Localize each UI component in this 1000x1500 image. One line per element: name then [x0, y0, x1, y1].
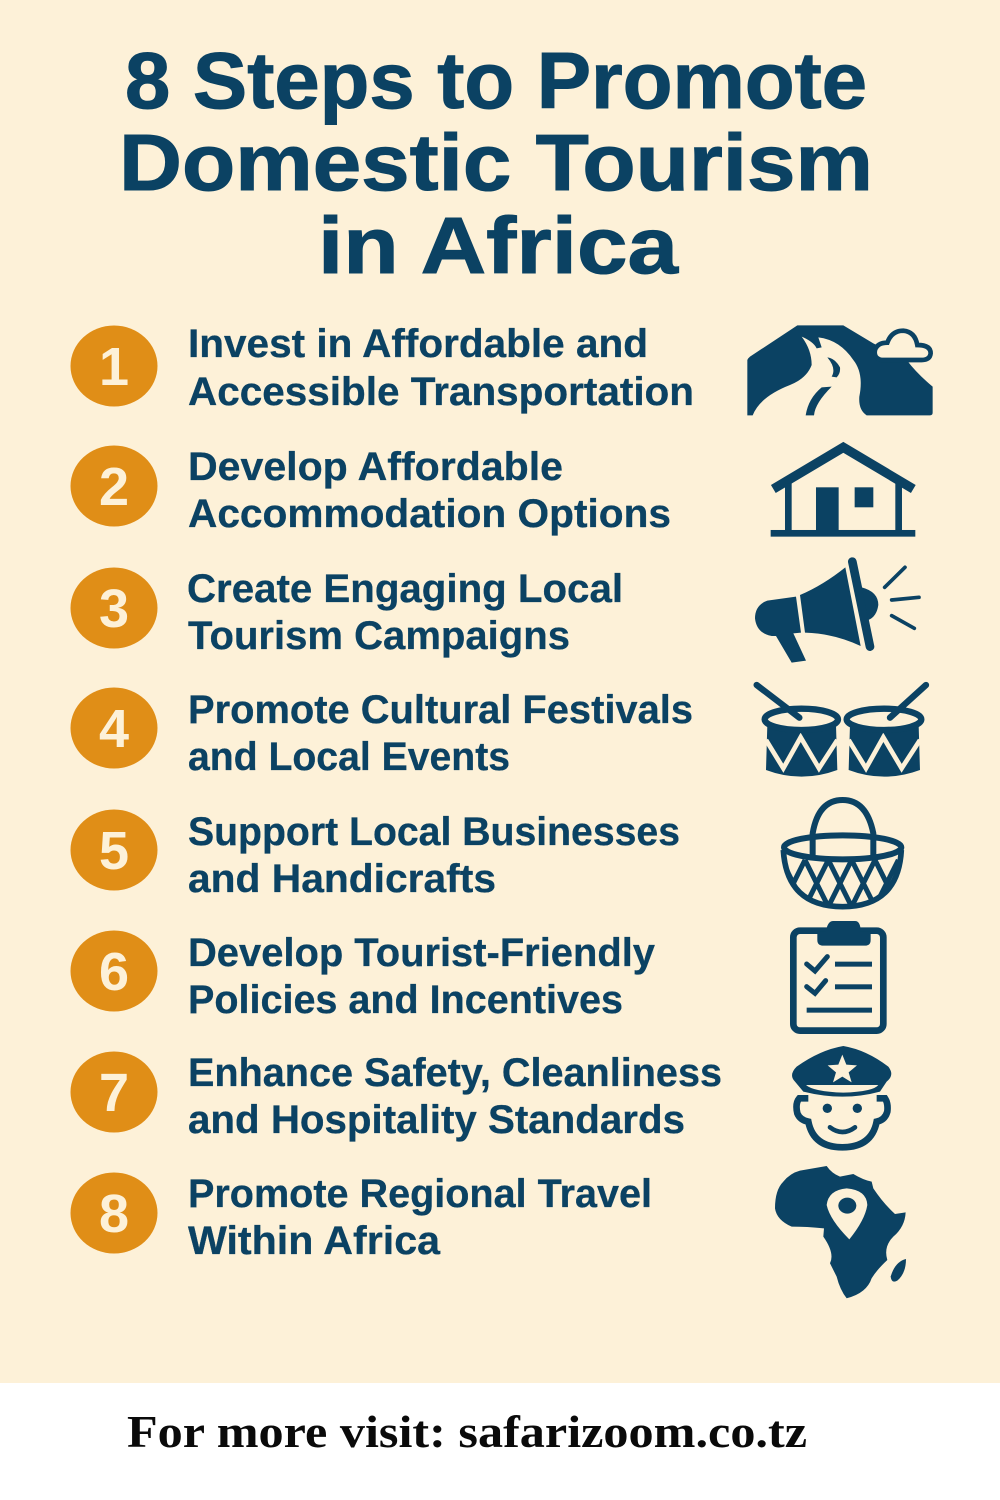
step 2 text: Accommodation Options — [188, 492, 671, 536]
step 3 text: Create Engaging Local — [187, 567, 623, 611]
step 6 text — [188, 931, 656, 1022]
title: Domestic Tourism — [119, 118, 873, 207]
step 4 text — [188, 688, 693, 779]
number badge 7 — [70, 1052, 158, 1132]
step 6 text: Develop Tourist-Friendly — [188, 931, 656, 975]
step 2 text — [188, 445, 671, 536]
icon: police officer face — [792, 1046, 891, 1147]
step 2 text: Develop Affordable — [188, 445, 563, 489]
step 1 — [70, 322, 933, 415]
step 4 — [70, 685, 926, 779]
step 7 text: and Hospitality Standards — [188, 1098, 685, 1142]
icon: woven basket — [778, 800, 902, 913]
step 1 text: Invest in Affordable and — [188, 322, 648, 366]
step 5 text: Support Local Businesses — [188, 810, 680, 854]
number badge 4 — [70, 688, 158, 768]
step 8 text: Within Africa — [188, 1219, 441, 1263]
title — [119, 36, 873, 290]
title: in Africa — [318, 201, 679, 290]
number badge 5 — [70, 810, 158, 890]
number badge 2: 2 — [99, 457, 129, 517]
number badge 3 — [70, 568, 158, 648]
number badge 7: 7 — [99, 1063, 129, 1123]
number badge 1 — [70, 326, 158, 406]
number badge 5: 5 — [99, 821, 129, 881]
step 4 text: Promote Cultural Festivals — [188, 688, 693, 732]
footer website link: For more visit: safarizoom.co.tz — [127, 1407, 807, 1457]
step 5 text: and Handicrafts — [188, 857, 496, 901]
step 4 text: and Local Events — [188, 735, 510, 779]
icon: house — [771, 447, 915, 537]
step 8 text: Promote Regional Travel — [188, 1172, 652, 1216]
step 2 — [70, 445, 915, 537]
number badge 3: 3 — [99, 579, 129, 639]
step 6 text: Policies and Incentives — [188, 978, 623, 1022]
icon: mountain road with cloud — [747, 325, 933, 415]
step 5 — [70, 800, 902, 913]
title: 8 Steps to Promote — [125, 36, 867, 125]
step 7 text — [188, 1051, 722, 1142]
step 1 text — [188, 322, 694, 414]
number badge 6: 6 — [99, 942, 129, 1002]
number badge 8 — [70, 1172, 158, 1254]
step 8 — [70, 1166, 906, 1298]
step 7 — [70, 1046, 891, 1147]
number badge 4: 4 — [99, 699, 129, 759]
step 6 — [70, 921, 883, 1031]
icon: megaphone — [755, 562, 919, 663]
number badge 1: 1 — [99, 337, 129, 397]
number badge 8: 8 — [99, 1184, 129, 1244]
number badge 6 — [70, 930, 158, 1012]
step 1 text: Accessible Transportation — [188, 370, 694, 414]
number badge 2 — [70, 446, 158, 526]
step 3 text — [187, 567, 623, 658]
step 5 text — [188, 810, 680, 901]
step 8 text — [188, 1172, 652, 1263]
icon: two drums — [757, 685, 926, 777]
icon: Africa map with location pin — [775, 1166, 906, 1298]
icon: clipboard checklist — [793, 921, 883, 1031]
step 3 text: Tourism Campaigns — [188, 614, 570, 658]
step 7 text: Enhance Safety, Cleanliness — [188, 1051, 722, 1095]
step 3 — [70, 562, 919, 663]
